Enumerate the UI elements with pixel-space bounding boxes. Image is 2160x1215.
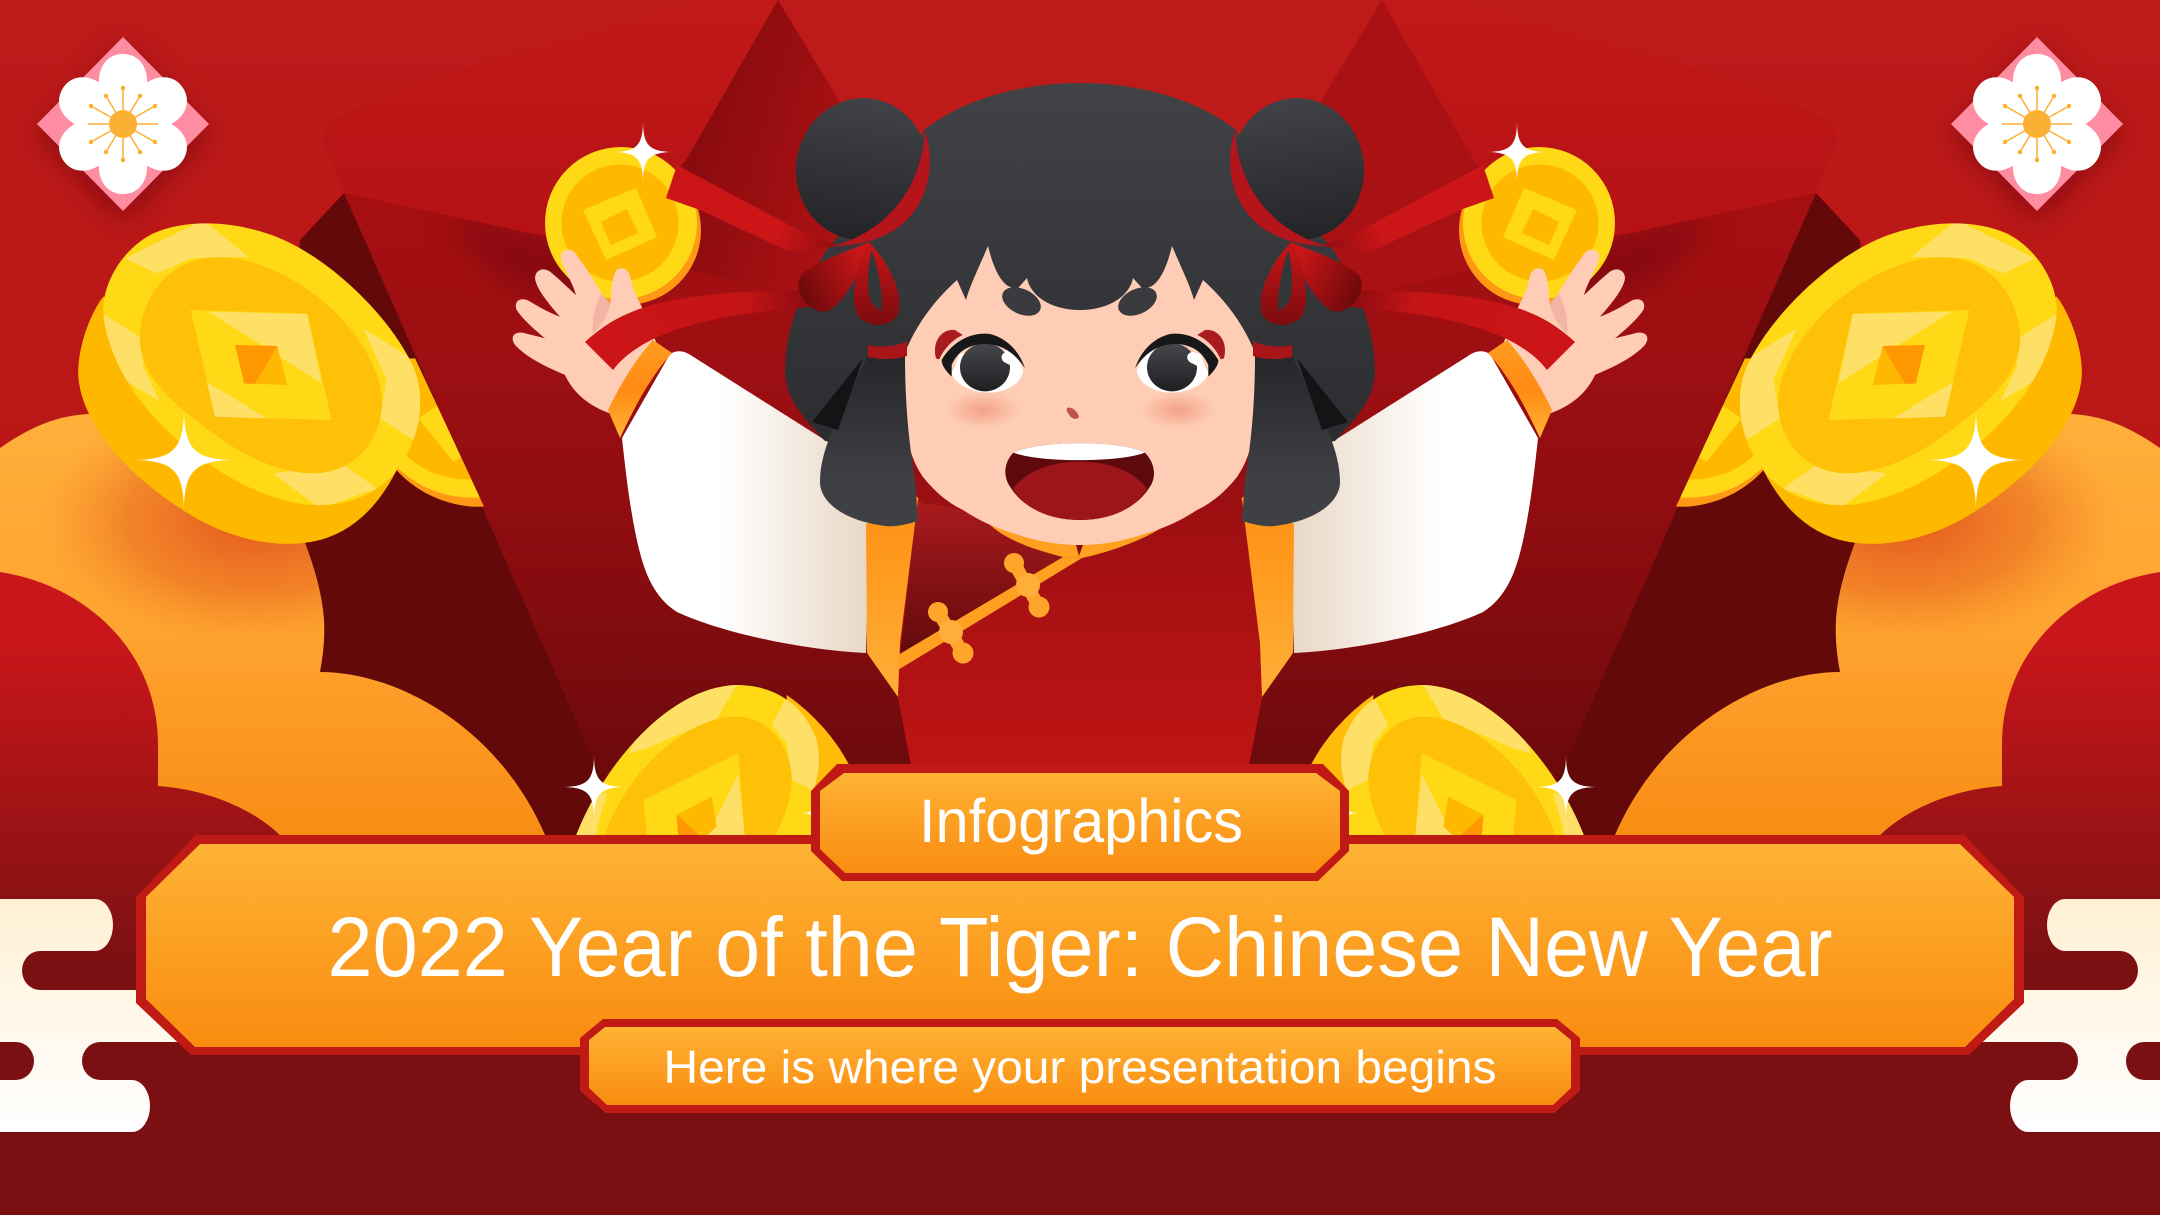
eyebrow left xyxy=(998,282,1045,321)
bangs xyxy=(870,150,1290,358)
eye right xyxy=(1135,330,1225,393)
right side decoration mirrored xyxy=(1307,37,2160,1132)
top tab xyxy=(811,764,1349,881)
eye left xyxy=(935,330,1025,393)
subtitle: Here is where your presentation begins xyxy=(664,1041,1496,1093)
right arm xyxy=(1290,122,1647,653)
left arm xyxy=(513,122,870,653)
heading: Infographics: Infographics xyxy=(919,787,1243,855)
mouth xyxy=(1005,443,1154,520)
envelope fan xyxy=(270,0,1890,845)
left side decoration: clouds, coins, flower xyxy=(0,37,853,1132)
girl character xyxy=(513,83,1647,770)
nose xyxy=(1067,408,1079,419)
blush right xyxy=(1140,391,1216,429)
back hair xyxy=(785,83,1375,441)
face xyxy=(903,225,1257,545)
blush left xyxy=(945,391,1021,429)
left hair parts xyxy=(585,90,937,526)
bottom tab xyxy=(580,1019,1580,1113)
collar shadow behind face xyxy=(906,465,1254,505)
main title banner xyxy=(136,835,2024,1055)
frog button upper xyxy=(1004,553,1050,618)
right hair parts xyxy=(1223,90,1575,526)
eyebrow right xyxy=(1114,282,1161,321)
dress xyxy=(866,480,1294,770)
collar notch xyxy=(1076,545,1083,556)
title: 2022 Year of the Tiger: Chinese New Year xyxy=(328,900,1832,994)
frog button lower xyxy=(928,602,974,664)
